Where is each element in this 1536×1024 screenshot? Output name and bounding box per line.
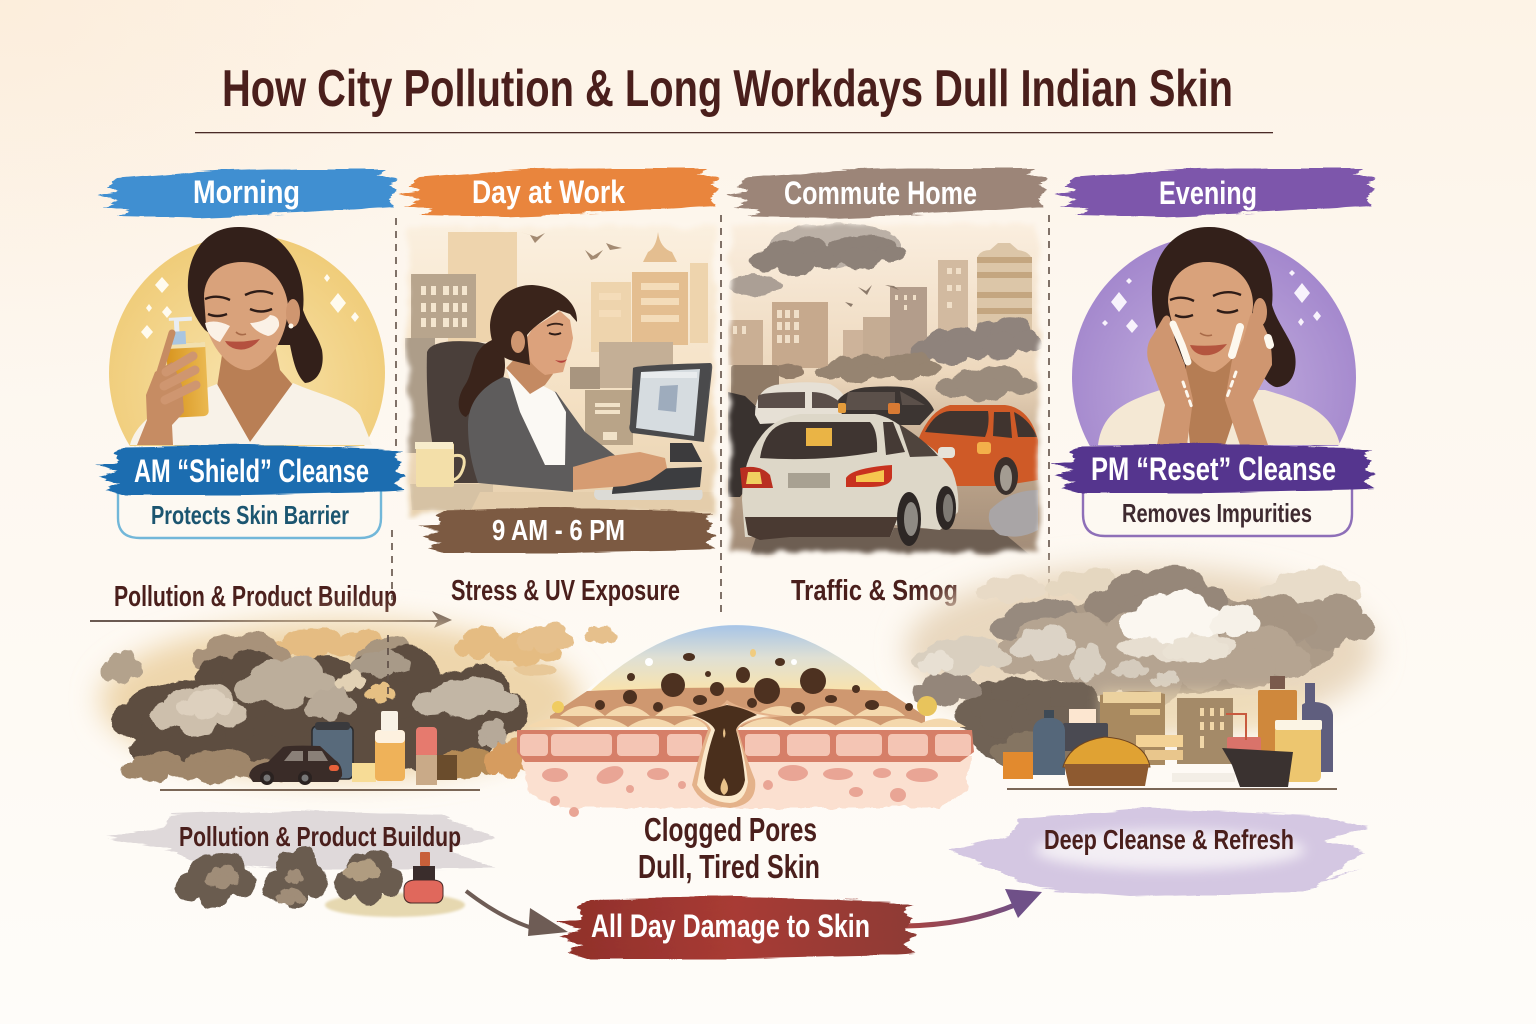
label: clogged pores: Clogged Pores [644,811,817,848]
panel: evening [1072,227,1356,446]
clogged pore [685,700,785,808]
banner: evening: Evening [1159,175,1257,211]
product: dark jar [312,722,353,779]
banner: commute home: Commute Home [784,175,977,211]
highlights [552,649,937,716]
label: traffic and smog: Traffic & Smog [791,575,958,607]
illustration: left pollution clouds [100,620,580,790]
sub label box: Protects Skin Barrier [151,500,349,530]
brown band [550,688,925,727]
sub label box [1083,488,1352,536]
arrow: to refresh [905,889,1042,926]
label: deep cleanse: Deep Cleanse & Refresh [1044,824,1294,855]
office worker [459,285,667,492]
top skin cells [527,706,966,727]
diagram: skin cross-section [513,623,974,817]
office desk [472,492,493,510]
label: pollution and product buildup top: Pollution & Product Buildup [114,581,397,613]
sparkles [1102,270,1321,333]
office city background [400,220,722,520]
bowl of powder [1063,737,1150,786]
sparkles [141,274,359,339]
arrow: to damage banner [466,891,568,936]
woman applying cleanser [130,227,372,445]
banner: morning [98,169,398,217]
product bottles [352,711,457,785]
red car [918,405,1038,495]
toy car [249,746,342,785]
banner: evening [1055,168,1376,216]
banner: all day damage: All Day Damage to Skin [591,908,870,944]
banner: 9 AM - 6 PM: 9 AM - 6 PM [492,515,625,547]
inner divider dash [387,635,389,698]
monitor [629,363,712,462]
coffee mug [415,442,464,487]
smear: left lower label [105,810,495,870]
banner: day at work [399,168,720,216]
label: clogged pores: Dull, Tired Skin [638,848,820,885]
sub label box [118,490,381,538]
label: clogged pores [638,811,820,885]
title: How City Pollution & Long Workdays Dull Indian Skin [222,60,1233,118]
white car [740,414,958,546]
panel: morning [109,227,385,446]
evening circle background [1072,238,1356,446]
banner: 9 AM - 6 PM [418,508,715,553]
smear: right lower label [950,808,1368,897]
icon: small smog and nail polish [175,846,465,917]
label: stress and UV: Stress & UV Exposure [451,575,680,607]
background cars [728,382,934,497]
banner: day at work: Day at Work [472,174,625,210]
dirt particles [595,653,913,714]
city blocks [1100,691,1233,765]
office chair [426,341,486,483]
banner: all day damage [555,897,915,959]
purple banner [1050,444,1374,493]
sub label box: Removes Impurities [1122,498,1312,528]
cosmetic products [1003,676,1333,787]
morning circle background [109,238,385,446]
dermis blobs [542,763,938,817]
timeline dividers [392,215,1049,712]
banner: morning: Morning [193,174,300,210]
panel: day at work [400,220,722,520]
skin cell row [517,730,974,762]
illustration: right pollution clouds [905,565,1375,789]
keyboard [594,467,703,500]
blue banner [95,445,404,495]
panel: commute home [722,220,1044,560]
smoggy city background [722,220,1044,560]
woman washing face [1098,227,1340,445]
callout: AM shield cleanse [95,445,404,538]
dermis layer [520,757,972,808]
protective dome [587,624,887,692]
label: pollution and product buildup lower: Pollution & Product Buildup [179,821,461,852]
purple banner: PM “Reset” Cleanse [1091,451,1336,487]
arrow: timeline [90,611,452,628]
side block under mug [410,484,493,510]
callout: PM reset cleanse [1050,444,1374,536]
banner: commute home [727,168,1048,217]
orange dust [513,623,617,676]
blue banner: AM “Shield” Cleanse [134,453,369,489]
